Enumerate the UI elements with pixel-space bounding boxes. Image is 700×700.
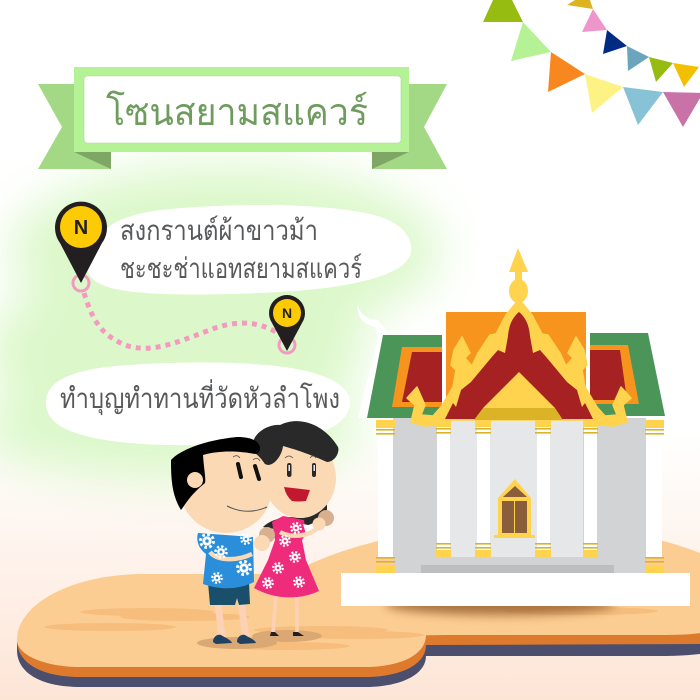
shirt — [197, 533, 254, 588]
side roofs — [367, 333, 665, 418]
arm — [210, 552, 252, 559]
shirt flowers — [201, 534, 251, 583]
ground patches — [44, 608, 424, 650]
man — [171, 437, 277, 649]
shoes — [270, 632, 304, 636]
temple — [341, 248, 690, 615]
face — [284, 456, 316, 502]
island top surface — [17, 526, 700, 667]
white base — [341, 573, 690, 606]
title text: โซนสยามสแควร์ — [106, 90, 368, 134]
central orange roof — [446, 312, 586, 420]
woman — [252, 421, 338, 642]
walls — [393, 418, 646, 573]
red gable and golden trim — [407, 299, 631, 426]
face — [227, 456, 267, 511]
shorts — [208, 582, 250, 605]
title banner — [38, 67, 447, 169]
songkran text: ชะชะช่าแอทสยามสแควร์ — [120, 253, 362, 284]
green glow behind clouds — [0, 165, 440, 480]
map pin 2 — [269, 295, 305, 353]
hair back — [263, 503, 327, 530]
shadow — [197, 637, 277, 649]
temple shadow — [385, 593, 658, 615]
hair — [171, 437, 260, 510]
head — [180, 443, 272, 533]
dress — [254, 516, 319, 597]
ear — [187, 472, 203, 488]
dress flowers — [263, 523, 304, 588]
map pin 1: N — [74, 217, 88, 239]
window — [494, 479, 535, 538]
songkran text: สงกรานต์ผ้าขาวม้า — [120, 215, 318, 246]
island base orange — [17, 632, 700, 677]
map pin 2: N — [282, 305, 292, 321]
island base navy — [17, 640, 700, 687]
cloud: songkran text — [88, 205, 411, 294]
legs — [218, 603, 246, 637]
bunting flags — [483, 0, 700, 127]
songkran text — [120, 215, 362, 284]
shadow — [252, 630, 322, 642]
spire — [509, 248, 528, 303]
legs — [273, 596, 297, 633]
merit making text: ทำบุญทำทานที่วัดหัวลำโพง — [60, 379, 340, 416]
hands — [318, 510, 334, 526]
route dotted line — [84, 293, 276, 348]
raised arm — [280, 525, 322, 536]
pillars — [376, 420, 664, 573]
map pin 1 — [55, 202, 107, 291]
shoes — [213, 635, 256, 644]
white cusp of cloud beside roof — [358, 303, 390, 418]
head — [264, 438, 336, 518]
hair — [252, 421, 338, 465]
ground islands — [17, 526, 700, 687]
cloud: merit making text — [46, 363, 350, 445]
sleeve — [303, 524, 315, 534]
hands — [259, 527, 275, 543]
